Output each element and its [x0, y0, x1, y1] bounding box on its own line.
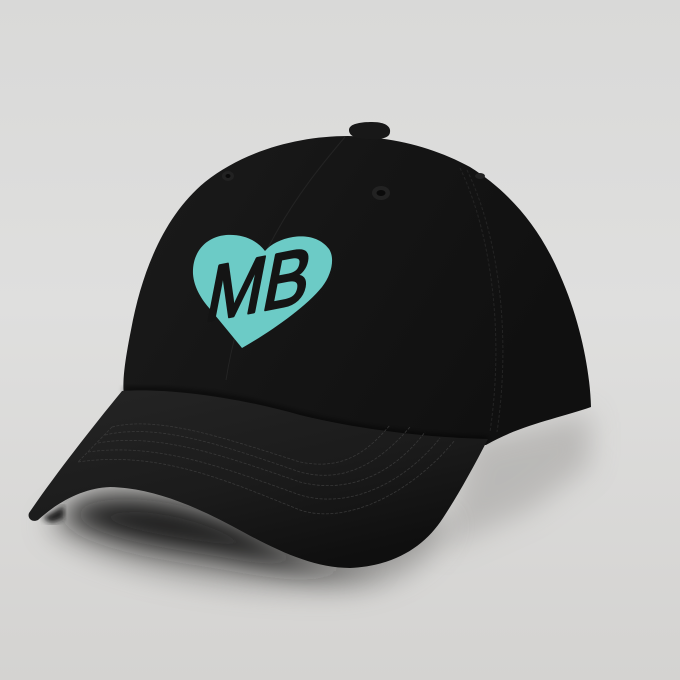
hat crown: [123, 136, 591, 445]
shade under crown edge: [124, 390, 488, 439]
hat: [29, 122, 591, 568]
crown eyelets: [222, 171, 485, 200]
cast shadow: right of hat: [440, 412, 590, 550]
logo: heart with MB: [193, 229, 332, 348]
MB lettering: MB: [200, 229, 319, 339]
top button: [349, 122, 390, 139]
cast shadow: under brim: [42, 480, 450, 590]
crown seams: [226, 137, 503, 432]
brim: [29, 390, 488, 568]
brim stitching: [78, 424, 455, 514]
heart: [193, 235, 332, 348]
